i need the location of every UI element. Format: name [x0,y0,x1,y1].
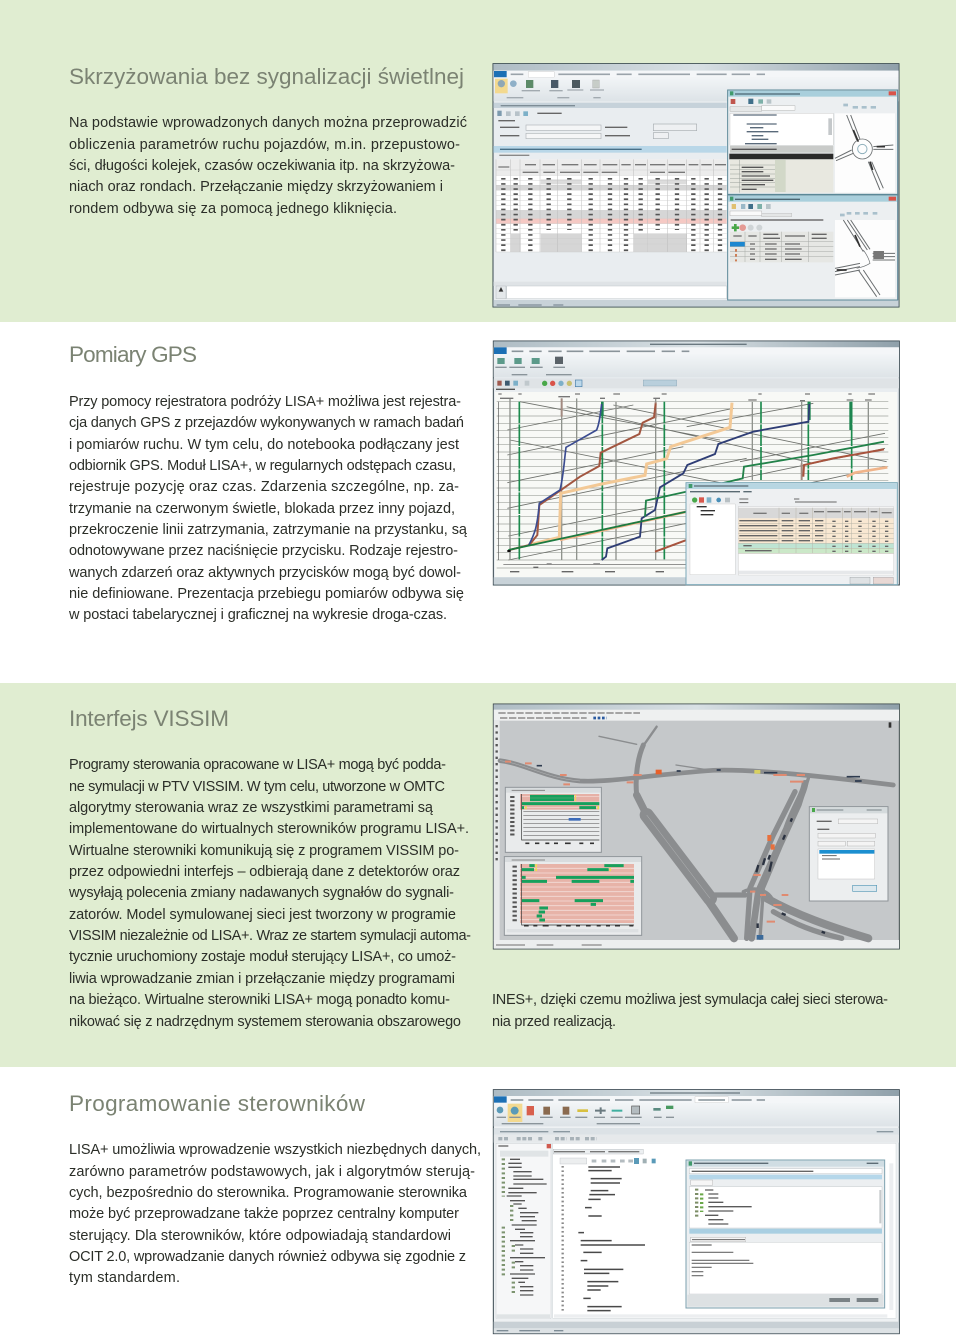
body text, left column: liwia wprowadzanie zmian i przełączanie między programami [69,971,455,987]
body text: tym standardem. [69,1270,180,1286]
heading: Interfejs VISSIM [69,706,229,731]
body text: odbiornik GPS. Moduł LISA+, w regularnych odstępach czasu, [69,458,456,474]
body text, left column: na bieżąco. Wirtualne sterowniki LISA+ mogą ponadto komu- [69,992,450,1008]
section: Programowanie sterowników [69,1090,899,1334]
body text, right column [492,992,888,1030]
body text, right column: nia przed realizacją. [492,1014,616,1030]
section: Pomiary GPS [68,341,899,623]
body text, left column: VISSIM niezależnie od LISA+. Wraz ze startem symulacji automa- [69,928,471,944]
body text: odnotowywane przez naciśnięcie przycisku. Rodzaje rejestro- [69,543,458,559]
project tree [496,1143,551,1318]
body text: może być przeprowadzane także poprzez centralny komputer [69,1206,459,1222]
body text: zarówno parametrów podstawowych, jak i algorytmów sterują- [69,1164,475,1180]
body text [69,1142,481,1286]
body text: niach oraz rondach. Przełączanie między skrzyżowaniem i [69,179,443,195]
heading: Programowanie sterowników [69,1091,366,1116]
signal plan window 2 [504,857,642,935]
body text, left column: Wirtualne sterowniki komunikują się z programem VISSIM po- [69,843,459,859]
section: Skrzyżowania bez sygnalizacji świetlnej [0,0,956,322]
body text: nie definiowane. Prezentacja przebiegu pomiarów odbywa się [69,586,464,602]
body text: i pomiarów ruchu. W tym celu, do notebooka podłączany jest [69,437,459,453]
body text: cych, bezpośrednio do sterownika. Programowanie sterownika [69,1185,468,1201]
red-brown curves [509,403,656,550]
panel: green band [0,0,956,322]
screenshot: controller programming editor [493,1090,899,1334]
body text [69,115,467,217]
body text, left column: tycznie uruchomiony zostaje moduł sterujący LISA+, co umoż- [69,949,456,965]
body text: przekroczenie linii zatrzymania, zatrzymanie na przystanku, są [69,522,468,538]
body text: sterujący. Dla sterowników, które odpowiadają standardowi [69,1228,451,1244]
vehicles and signal heads [505,762,805,922]
body text: ści, długości kolejek, czasów oczekiwania itp. na skrzyżowa- [69,158,455,174]
screenshot: GPS distance-time chart [493,341,899,585]
body text, right column: INES+, dzięki czemu możliwa jest symulacja całej sieci sterowa- [492,992,888,1008]
body text: rondem odbywa się za pomocą jednego kliknięcia. [69,201,397,217]
blue curves [528,404,602,546]
body text: rejestruje pozycję oraz czas. Zdarzenia szczególne, np. za- [69,479,459,495]
body text: trzymanie na czerwonym świetle, blokada przez inny pojazd, [69,501,455,517]
screenshot: VISSIM network simulation [493,704,899,949]
body text, left column [68,757,471,1030]
body text, left column: wysyłają polecenia zmiany nadawanych sygnałów do sygnali- [68,885,454,901]
code editor [553,1143,896,1318]
heading: Skrzyżowania bez sygnalizacji świetlnej [69,64,464,89]
screenshot: intersection capacity table [493,64,899,307]
intersection window [728,195,898,300]
dialog: controller compile [686,1160,885,1308]
body text, left column: nikować się z nadrzędnym systemem sterowania obszarowego [69,1014,461,1030]
body text: obliczenia parametrów ruchu pojazdów, m.in. przepustowo- [69,137,460,153]
body text, left column: implementowane do wirtualnych sterowników programu LISA+. [69,821,469,837]
body text: LISA+ umożliwia wprowadzenie wszystkich niezbędnych danych, [69,1142,481,1158]
body text: Na podstawie wprowadzonych danych można przeprowadzić [69,115,467,131]
body text: w postaci tabelarycznej i graficznej na wykresie droga-czas. [68,607,447,623]
body text, left column: przez odpowiedni interfejs – odbierają dane z detektorów oraz [69,864,460,880]
signal lines [510,398,868,560]
road network [500,727,893,938]
dialog: table of runs [686,483,897,585]
diagonal lines [507,402,887,560]
controller dialog [809,807,888,901]
green curves [508,512,687,550]
table [496,159,727,252]
panel: green band [0,683,956,1067]
body text, left column: Programy sterowania opracowane w LISA+ mogą być podda- [69,757,446,773]
body text, left column: algorytmy sterowania wraz ze wszystkimi parametrami są [69,800,434,816]
orange curves [528,403,732,545]
body text: cja danych GPS z przejazdów wykonywanych w ramach badań [69,415,464,431]
body text, left column: ne symulacji w PTV VISSIM. W tym celu, utworzone w OMTC [69,779,445,795]
body text, left column: zatorów. Model symulowanej sieci jest tworzony w programie [69,907,456,923]
body text: wanych zdarzeń oraz aktywnych przycisków mogą być dowol- [68,565,461,581]
heading: Pomiary GPS [69,342,197,367]
roundabout window [728,90,898,194]
bottom pane [493,282,727,286]
signal plan window 1 [505,787,601,852]
section: Interfejs VISSIM [0,683,956,1067]
body text [68,394,468,623]
body text: Przy pomocy rejestratora podróży LISA+ możliwa jest rejestra- [69,394,461,410]
body text: OCIT 2.0, wprowadzanie danych również odbywa się zgodnie z [69,1249,466,1265]
chart [495,392,897,577]
